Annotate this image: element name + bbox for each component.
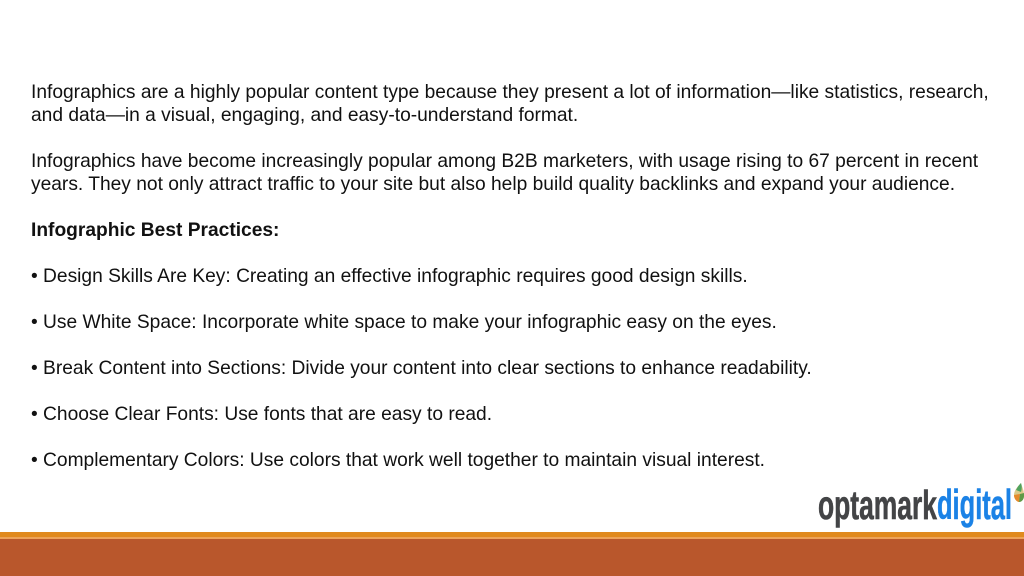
second paragraph (31, 151, 978, 195)
logo: optamarkdigital: optamark (818, 482, 937, 528)
footer: orange stripe (0, 532, 1024, 537)
icon: logo leaf (1014, 483, 1024, 502)
intro paragraph: Infographics are a highly popular content type because they present a lot of information—like statistics, research, (31, 82, 989, 103)
bullet: sections: • Break Content into Sections: Divide your content into clear sections to enhance readability. (31, 358, 812, 379)
heading: best practices: Infographic Best Practices: (31, 220, 279, 241)
second paragraph: Infographics have become increasingly popular among B2B marketers, with usage rising to 67 percent in recent (31, 151, 978, 172)
intro paragraph (31, 82, 989, 126)
bullet: design skills: • Design Skills Are Key: Creating an effective infographic requires good design skills. (31, 266, 748, 287)
footer: rust band (0, 537, 1024, 576)
bullet: white space: • Use White Space: Incorporate white space to make your infographic easy on the eyes. (31, 312, 777, 333)
bullet: fonts: • Choose Clear Fonts: Use fonts that are easy to read. (31, 404, 492, 425)
intro paragraph: and data—in a visual, engaging, and easy-to-understand format. (31, 105, 578, 126)
bullet: colors: • Complementary Colors: Use colors that work well together to maintain visual interest. (31, 450, 765, 471)
second paragraph: years. They not only attract traffic to your site but also help build quality backlinks and expand your audience. (31, 174, 955, 195)
